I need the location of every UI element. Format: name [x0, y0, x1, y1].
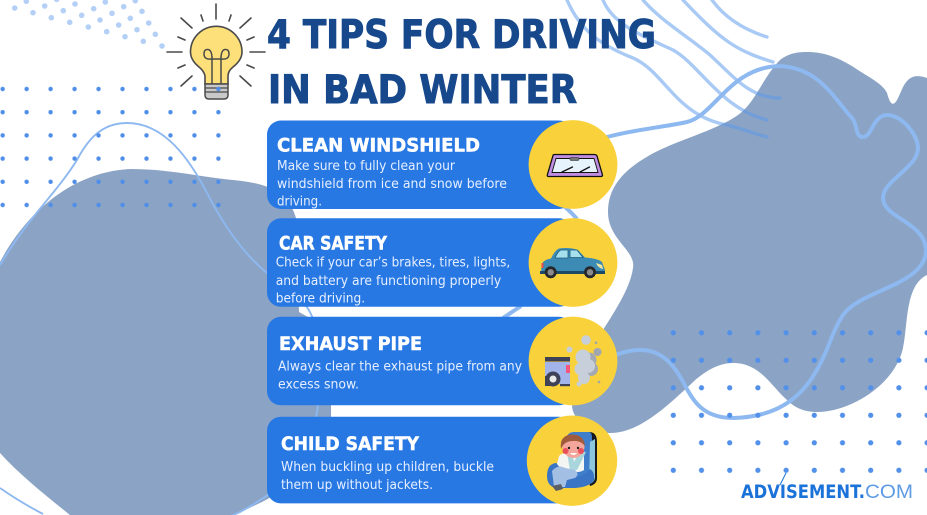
icon: light bulb [167, 4, 265, 99]
dot grid left [0, 77, 230, 216]
panel: child safety [267, 416, 617, 506]
icon: exhaust smoke [545, 335, 602, 386]
heading: car safety: CAR SAFETY [279, 234, 387, 255]
title: IN BAD WINTER [268, 67, 577, 113]
panel: clean windshield [267, 120, 617, 210]
heading: clean windshield: CLEAN WINDSHIELD [277, 136, 480, 157]
icon: windshield [547, 154, 602, 176]
text: child safety: When buckling up children, buckle [281, 460, 494, 475]
title: 4 TIPS FOR DRIVING [267, 12, 656, 58]
text: exhaust pipe: excess snow. [278, 378, 359, 392]
text: car safety: Check if your car’s brakes, tires, lights, [276, 256, 510, 271]
text: clean windshield: windshield from ice and snow before [277, 177, 507, 192]
icon: car [540, 248, 605, 278]
text: car safety: and battery are functioning properly [276, 274, 501, 289]
logo: advisement.com: COM [865, 481, 913, 503]
text: car safety [276, 256, 510, 307]
text: child safety [281, 460, 494, 493]
panel: car safety [267, 218, 617, 307]
dot grid right [659, 319, 927, 484]
panel: exhaust pipe [267, 317, 617, 405]
thick wavy line right [503, 66, 926, 418]
heading: exhaust pipe: EXHAUST PIPE [279, 334, 422, 355]
left background blob [0, 169, 331, 515]
thin outline line left [0, 123, 321, 515]
text: clean windshield: driving. [277, 195, 322, 210]
text: child safety: them up without jackets. [281, 478, 433, 493]
logo: advisement.com [741, 473, 913, 503]
text: car safety: before driving. [276, 292, 365, 307]
text: clean windshield [277, 159, 507, 210]
logo: advisement.com: ADVISEMENT. [741, 481, 865, 503]
right background blob [572, 52, 927, 433]
icon: child in car seat [547, 432, 597, 491]
title [267, 12, 656, 113]
wavy lines top right [567, 0, 780, 137]
text: exhaust pipe [278, 360, 522, 392]
text: clean windshield: Make sure to fully clean your [277, 159, 456, 174]
light dot pattern top left [12, 0, 165, 49]
text: exhaust pipe: Always clear the exhaust pipe from any [278, 360, 522, 374]
heading: child safety: CHILD SAFETY [281, 434, 419, 455]
